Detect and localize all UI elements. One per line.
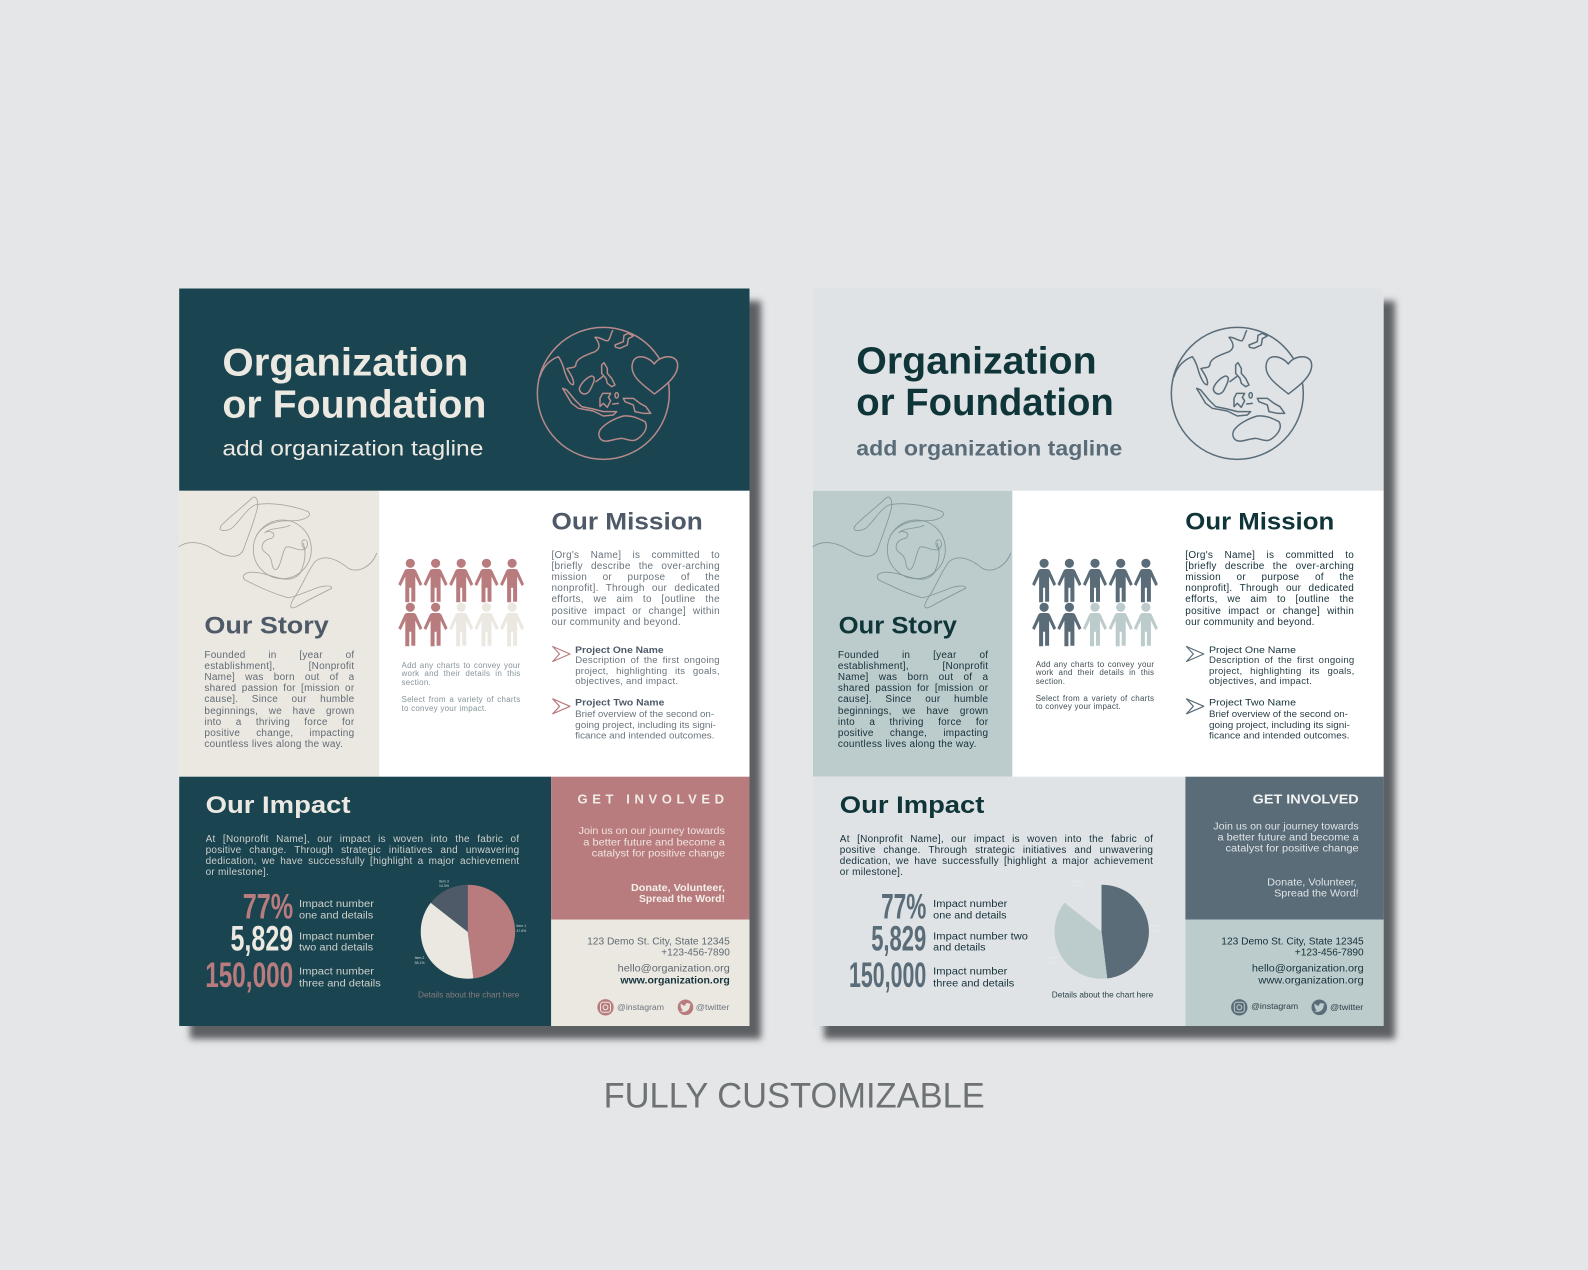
call to action text (1213, 821, 1359, 855)
chart details caption: Details about the chart here (1052, 989, 1154, 999)
address: 123 Demo St. City, State 12345 (1221, 936, 1364, 947)
impact text: At [Nonprofit Name], our impact is woven into the fabric of (206, 834, 519, 845)
donate line: Donate, Volunteer, (631, 883, 725, 894)
impact text (840, 834, 1153, 880)
chart caption: work and their details in this (1036, 668, 1154, 677)
pie chart: Item 2 (415, 956, 424, 960)
stat: 77%: Impact number (299, 899, 375, 910)
stat: 5,829: and details (933, 943, 986, 954)
donate line (1267, 877, 1359, 899)
heading: get involved: GET INVOLVED (578, 791, 724, 806)
project one (553, 645, 720, 689)
project two (553, 698, 716, 741)
pie chart: Item 3 (1073, 880, 1083, 884)
mission text: efforts, we aim to [outline the (552, 594, 720, 605)
chart caption (1036, 661, 1154, 721)
story text (838, 650, 988, 753)
stat: 150,000: Impact number (299, 967, 375, 978)
address: www.organization.org (1257, 975, 1364, 986)
project two description (1209, 709, 1350, 741)
stat: 5,829: Impact number two (933, 931, 1029, 942)
title: Organization (856, 340, 1097, 382)
mission text: mission or purpose of the (1185, 572, 1354, 583)
title: or Foundation (222, 383, 486, 426)
icon: instagram (597, 999, 614, 1016)
project one description: project, highlighting its goals, (1209, 666, 1354, 677)
address: 123 Demo St. City, State 12345 (587, 936, 730, 947)
stat: 150,000: 150,000 (849, 956, 926, 995)
twitter handle: @twitter (696, 1003, 730, 1012)
panel: get involved (1185, 777, 1384, 920)
address: +123-456-7890 (1295, 948, 1364, 959)
call to action text: catalyst for positive change (1226, 844, 1359, 855)
panel: contact (1185, 920, 1384, 1026)
pie chart (1049, 880, 1160, 979)
chart caption: section. (1036, 677, 1065, 686)
project one name: Project One Name (575, 645, 664, 656)
mission text: positive impact or change] within (552, 606, 720, 617)
stat: 77% (881, 887, 1008, 926)
stat: 77%: 77% (243, 887, 293, 926)
pictogram chart: people (1032, 559, 1158, 646)
panel: our story (813, 491, 1012, 777)
address (587, 936, 730, 986)
project one description (1209, 656, 1354, 689)
pie chart: 38.1% (1049, 961, 1058, 965)
project two description: ficance and intended outcomes. (1209, 730, 1350, 741)
caption: fully customizable: FULLY CUSTOMIZABLE (604, 1076, 985, 1115)
call to action text: Join us on our journey towards (1213, 821, 1359, 832)
icon: twitter (678, 1000, 693, 1015)
impact text: or milestone]. (840, 867, 903, 878)
call to action text: catalyst for positive change (592, 849, 725, 860)
poster: grey and slate version (813, 288, 1384, 1026)
pie chart: Item 1 (1150, 924, 1160, 928)
stat: 5,829: 5,829 (871, 920, 926, 959)
icon: arrow (1186, 699, 1204, 714)
story text: shared passion for [mission or (204, 683, 354, 694)
mission text: our community and beyond. (1185, 617, 1315, 628)
pie chart: 38.1% (415, 961, 424, 965)
panel: header (179, 288, 749, 491)
project one description: project, highlighting its goals, (575, 666, 720, 677)
panel: our impact (813, 777, 1185, 1026)
heading: our impact: Our Impact (840, 792, 984, 819)
chart caption: Select from a variety of charts (1036, 694, 1154, 703)
illustration: hands holding globe (179, 497, 377, 608)
icon: arrow (553, 699, 570, 714)
title (856, 340, 1114, 424)
donate line: Donate, Volunteer, (1267, 877, 1357, 888)
impact text: positive change. Through strategic initiatives and unwavering (206, 845, 519, 856)
impact text: dedication, we have successfully [highlight a major achievement (840, 856, 1153, 867)
story text: Name] was born out of a (838, 672, 988, 683)
project two description: ficance and intended outcomes. (575, 730, 714, 741)
panel: our story (179, 491, 379, 777)
icon: arrow (553, 646, 570, 662)
story text: cause]. Since our humble (204, 694, 354, 705)
impact text (206, 834, 519, 880)
panel: our impact (179, 777, 551, 1026)
project one description: objectives, and impact. (1209, 676, 1312, 687)
stat: 150,000: 150,000 (205, 956, 293, 995)
story text: cause]. Since our humble (838, 694, 988, 705)
icon: instagram (1231, 999, 1248, 1016)
panel: header (813, 288, 1384, 491)
story text: establishment], [Nonprofit (204, 661, 354, 672)
project two name: Project Two Name (575, 698, 664, 709)
chart caption (402, 662, 520, 722)
story text: Founded in [year of (204, 650, 354, 661)
pie chart: 47.6% (516, 929, 526, 933)
icon: globe with heart (537, 327, 678, 459)
address (1221, 936, 1364, 986)
icon: arrow (1186, 646, 1204, 662)
story text: establishment], [Nonprofit (838, 661, 988, 672)
project two (1186, 698, 1350, 741)
title (222, 342, 486, 426)
poster: teal and rose version (179, 288, 749, 1026)
story text: shared passion for [mission or (838, 683, 988, 694)
stat: 5,829 (230, 920, 375, 959)
project one description: objectives, and impact. (575, 676, 678, 687)
story text: into a thriving force for (838, 717, 988, 728)
project two description: going project, including its signi- (575, 720, 716, 731)
address: +123-456-7890 (661, 948, 730, 959)
heading: get involved: GET INVOLVED (1253, 791, 1359, 806)
instagram handle: @instagram (617, 1003, 664, 1012)
instagram handle: @instagram (1251, 1002, 1299, 1011)
story text: Founded in [year of (838, 650, 988, 661)
pictogram chart: people (398, 559, 524, 646)
chart details caption: Details about the chart here (418, 989, 520, 999)
pie chart: Item 3 (439, 880, 449, 884)
mission text (1185, 550, 1354, 630)
panel: get involved (551, 777, 750, 920)
stat: 5,829: two and details (299, 943, 373, 954)
panel: our mission (1012, 491, 1384, 777)
chart caption: work and their details in this (402, 669, 520, 678)
heading: our mission: Our Mission (1185, 508, 1334, 536)
donate line (631, 883, 725, 905)
stat: 150,000: Impact number (933, 967, 1008, 978)
story text: into a thriving force for (204, 717, 354, 728)
story text: beginnings, we have grown (204, 706, 354, 717)
impact text: or milestone]. (206, 867, 269, 878)
pie chart: Item 1 (516, 924, 526, 928)
mission text: [briefly describe the over-arching (1185, 561, 1354, 572)
stat: 5,829: 5,829 (230, 920, 293, 959)
chart caption: section. (402, 678, 431, 687)
project two name: Project Two Name (1209, 698, 1296, 709)
heading: our story: Our Story (204, 612, 329, 639)
icon: globe with heart (1171, 327, 1312, 459)
address: www.organization.org (619, 975, 730, 986)
story text: positive change, impacting (204, 728, 354, 739)
donate line: Spread the Word! (1274, 888, 1359, 899)
project one description (575, 656, 720, 689)
stat: 77%: one and details (933, 910, 1007, 921)
story text: countless lives along the way. (204, 739, 343, 750)
title: or Foundation (856, 382, 1114, 424)
chart caption: to convey your impact. (1036, 702, 1121, 711)
project two description: Brief overview of the second on- (1209, 709, 1348, 720)
project one name: Project One Name (1209, 645, 1296, 656)
mission text: positive impact or change] within (1185, 606, 1354, 617)
poster shadow: grey version (824, 301, 1395, 1039)
project one (1186, 645, 1354, 689)
panel: contact (551, 920, 750, 1026)
mission text: efforts, we aim to [outline the (1185, 594, 1354, 605)
mission text: nonprofit]. Through our dedicated (1185, 583, 1354, 594)
title: Organization (222, 342, 468, 385)
stat: 77% (243, 887, 375, 926)
stat: 77%: Impact number (933, 899, 1008, 910)
panel: our mission (379, 491, 750, 777)
poster shadow: teal version (190, 301, 761, 1039)
mission text: [Org's Name] is committed to (552, 550, 720, 561)
illustration: hands holding globe (813, 497, 1011, 608)
chart caption: Select from a variety of charts (402, 695, 520, 704)
project two description: going project, including its signi- (1209, 720, 1350, 731)
icon: twitter (1312, 1000, 1327, 1015)
project two description (575, 709, 716, 741)
pie chart: 47.6% (1150, 929, 1160, 933)
call to action text: a better future and become a (583, 837, 725, 848)
tagline: add organization tagline (856, 437, 1122, 461)
pie chart: 14.3% (1073, 884, 1083, 888)
stat: 150,000: three and details (933, 978, 1014, 989)
stat: 5,829: Impact number (299, 931, 375, 942)
story text: Name] was born out of a (204, 672, 354, 683)
pie chart (415, 880, 526, 979)
mission text: [Org's Name] is committed to (1185, 550, 1354, 561)
impact text: dedication, we have successfully [highlight a major achievement (206, 856, 519, 867)
call to action text (579, 826, 725, 860)
heading: our story: Our Story (839, 612, 957, 639)
pie chart: 14.3% (439, 884, 449, 888)
mission text: mission or purpose of the (552, 572, 720, 583)
impact text: At [Nonprofit Name], our impact is woven into the fabric of (840, 834, 1153, 845)
tagline: add organization tagline (222, 437, 483, 461)
call to action text: a better future and become a (1218, 832, 1359, 843)
impact text: positive change. Through strategic initiatives and unwavering (840, 845, 1153, 856)
stat: 77%: 77% (881, 887, 926, 926)
mission text: [briefly describe the over-arching (552, 561, 720, 572)
heading: our impact: Our Impact (206, 792, 351, 819)
chart caption: to convey your impact. (402, 704, 487, 713)
address: hello@organization.org (1252, 964, 1364, 975)
story text: beginnings, we have grown (838, 706, 988, 717)
heading: our mission: Our Mission (552, 508, 703, 536)
address: hello@organization.org (618, 964, 730, 975)
project two description: Brief overview of the second on- (575, 709, 714, 720)
mission text: our community and beyond. (552, 617, 681, 628)
mission text: nonprofit]. Through our dedicated (552, 583, 720, 594)
mission text (552, 550, 720, 630)
story text: positive change, impacting (838, 728, 988, 739)
twitter handle: @twitter (1330, 1003, 1364, 1012)
stat: 150,000: three and details (299, 978, 381, 989)
call to action text: Join us on our journey towards (579, 826, 725, 837)
stat: 77%: one and details (299, 910, 373, 921)
stat: 5,829 (871, 920, 1029, 959)
story text (204, 650, 354, 753)
donate line: Spread the Word! (639, 894, 725, 905)
pie chart: Item 2 (1049, 956, 1058, 960)
story text: countless lives along the way. (838, 739, 977, 750)
